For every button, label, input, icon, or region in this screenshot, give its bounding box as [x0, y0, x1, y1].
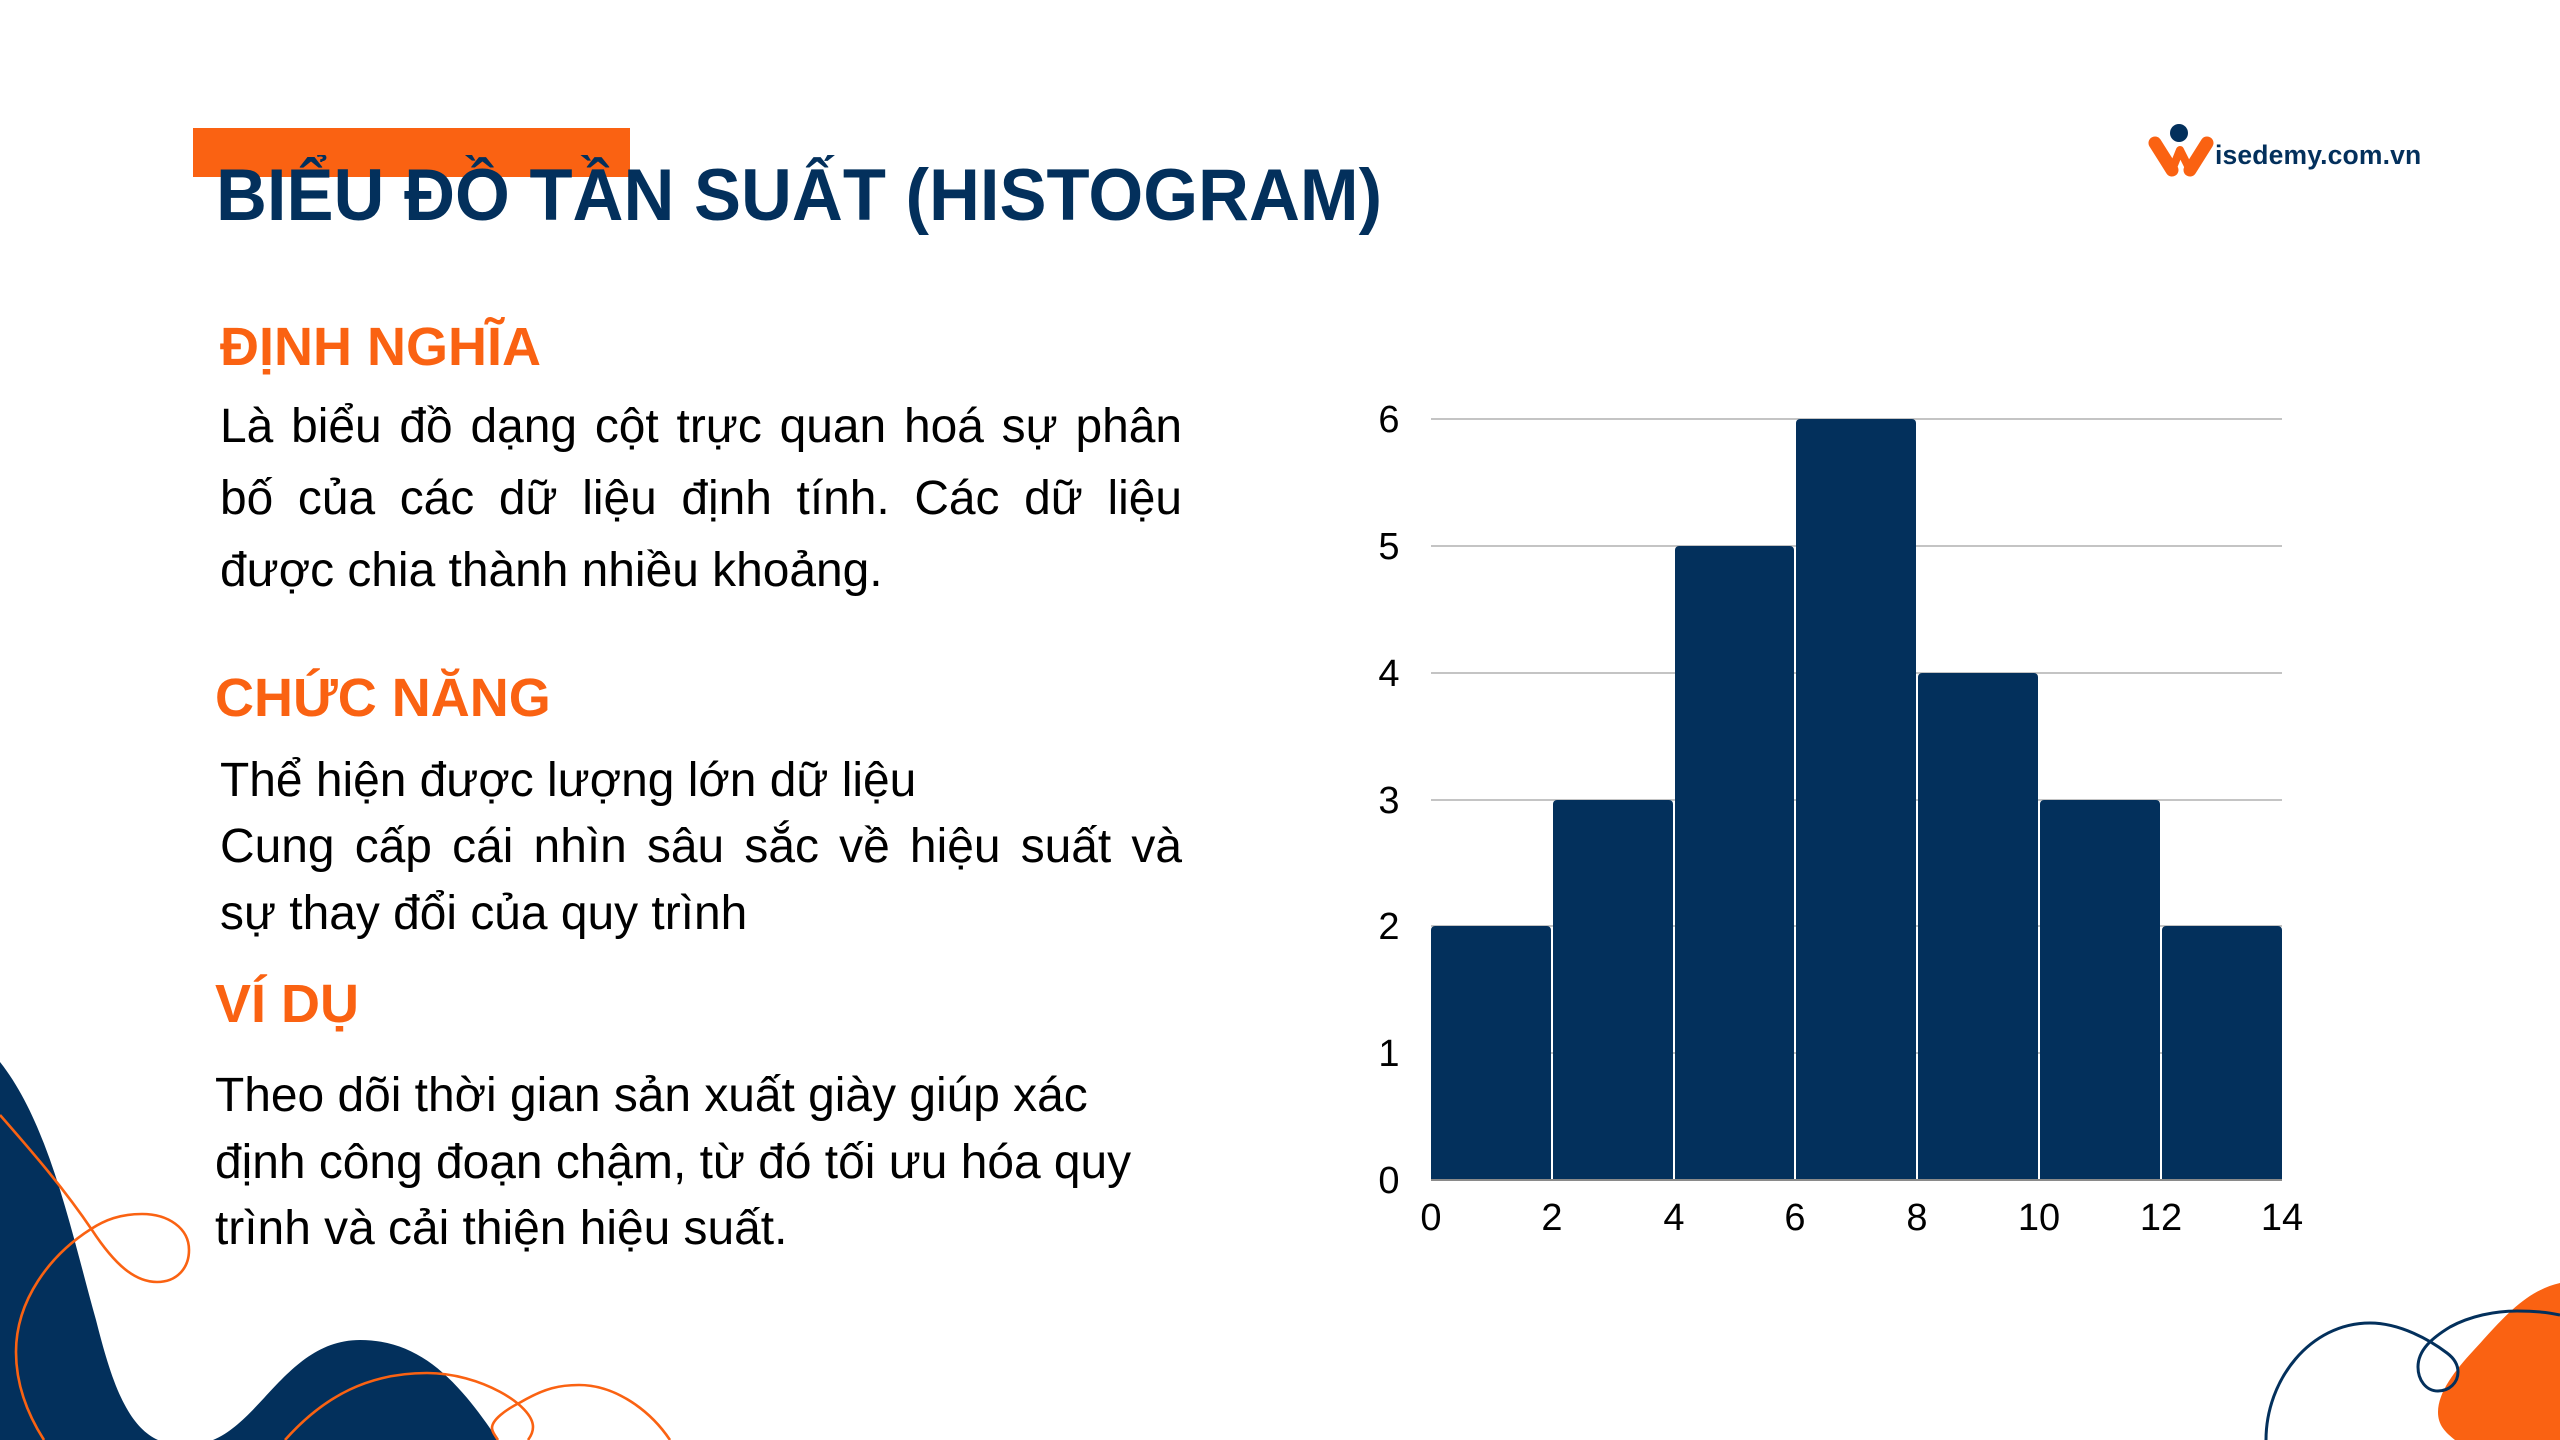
definition text [220, 400, 1182, 596]
x axis labels: 12 [2140, 1197, 2182, 1239]
x axis line [1431, 1179, 2282, 1181]
example text: Theo dõi thời gian sản xuất giày giúp xác [215, 1069, 1088, 1122]
y axis labels: 0 [1378, 1160, 1400, 1202]
y axis labels: 4 [1378, 653, 1400, 695]
y axis labels: 3 [1378, 780, 1400, 822]
heading: function: CHỨC NĂNG [215, 668, 551, 728]
y axis labels: 6 [1378, 399, 1400, 441]
function text: sự thay đổi của quy trình [220, 887, 747, 940]
function text: Cung cấp cái nhìn sâu sắc về hiệu suất và [220, 820, 1182, 873]
section: function [215, 668, 1182, 940]
x axis labels: 4 [1663, 1197, 1685, 1239]
example text: định công đoạn chậm, từ đó tối ưu hóa quy [215, 1136, 1131, 1189]
section: definition [220, 317, 1182, 596]
gridlines [1431, 419, 2282, 1053]
section: example [215, 974, 1131, 1255]
x axis labels: 2 [1541, 1197, 1563, 1239]
logo: Wisedemy [2148, 124, 2421, 176]
y axis labels: 5 [1378, 526, 1400, 568]
y axis labels: 2 [1378, 906, 1400, 948]
example text: trình và cải thiện hiệu suất. [215, 1202, 787, 1255]
definition text: bố của các dữ liệu định tính. Các dữ liệu [220, 472, 1182, 524]
heading: definition: ĐỊNH NGHĨA [220, 317, 541, 377]
y axis labels: 1 [1378, 1033, 1400, 1075]
navy curve bottom right [2266, 1311, 2560, 1440]
x axis labels: 8 [1906, 1197, 1928, 1239]
function text: Thể hiện được lượng lớn dữ liệu [220, 754, 916, 807]
definition text: được chia thành nhiều khoảng. [220, 544, 883, 596]
navy blobs bottom left [0, 1062, 498, 1440]
logo icon [2148, 124, 2214, 176]
function text [220, 754, 1182, 940]
orange blob bottom right [2438, 1283, 2560, 1440]
title accent bar [193, 128, 630, 177]
x axis labels: 0 [1420, 1197, 1442, 1239]
definition text: Là biểu đồ dạng cột trực quan hoá sự phân [220, 400, 1182, 452]
heading: example: VÍ DỤ [215, 974, 359, 1034]
x axis labels: 6 [1784, 1197, 1806, 1239]
y axis labels [1378, 399, 1400, 1202]
histogram bars [1431, 419, 2282, 1180]
x axis labels [1420, 1197, 2303, 1239]
title: BIỂU ĐỒ TẦN SUẤT (HISTOGRAM) [216, 154, 1382, 236]
x axis labels: 14 [2261, 1197, 2303, 1239]
logo text: isedemy.com.vn [2215, 140, 2421, 170]
orange curves bottom left [0, 1115, 670, 1440]
example text [215, 1069, 1131, 1255]
x axis labels: 10 [2018, 1197, 2060, 1239]
